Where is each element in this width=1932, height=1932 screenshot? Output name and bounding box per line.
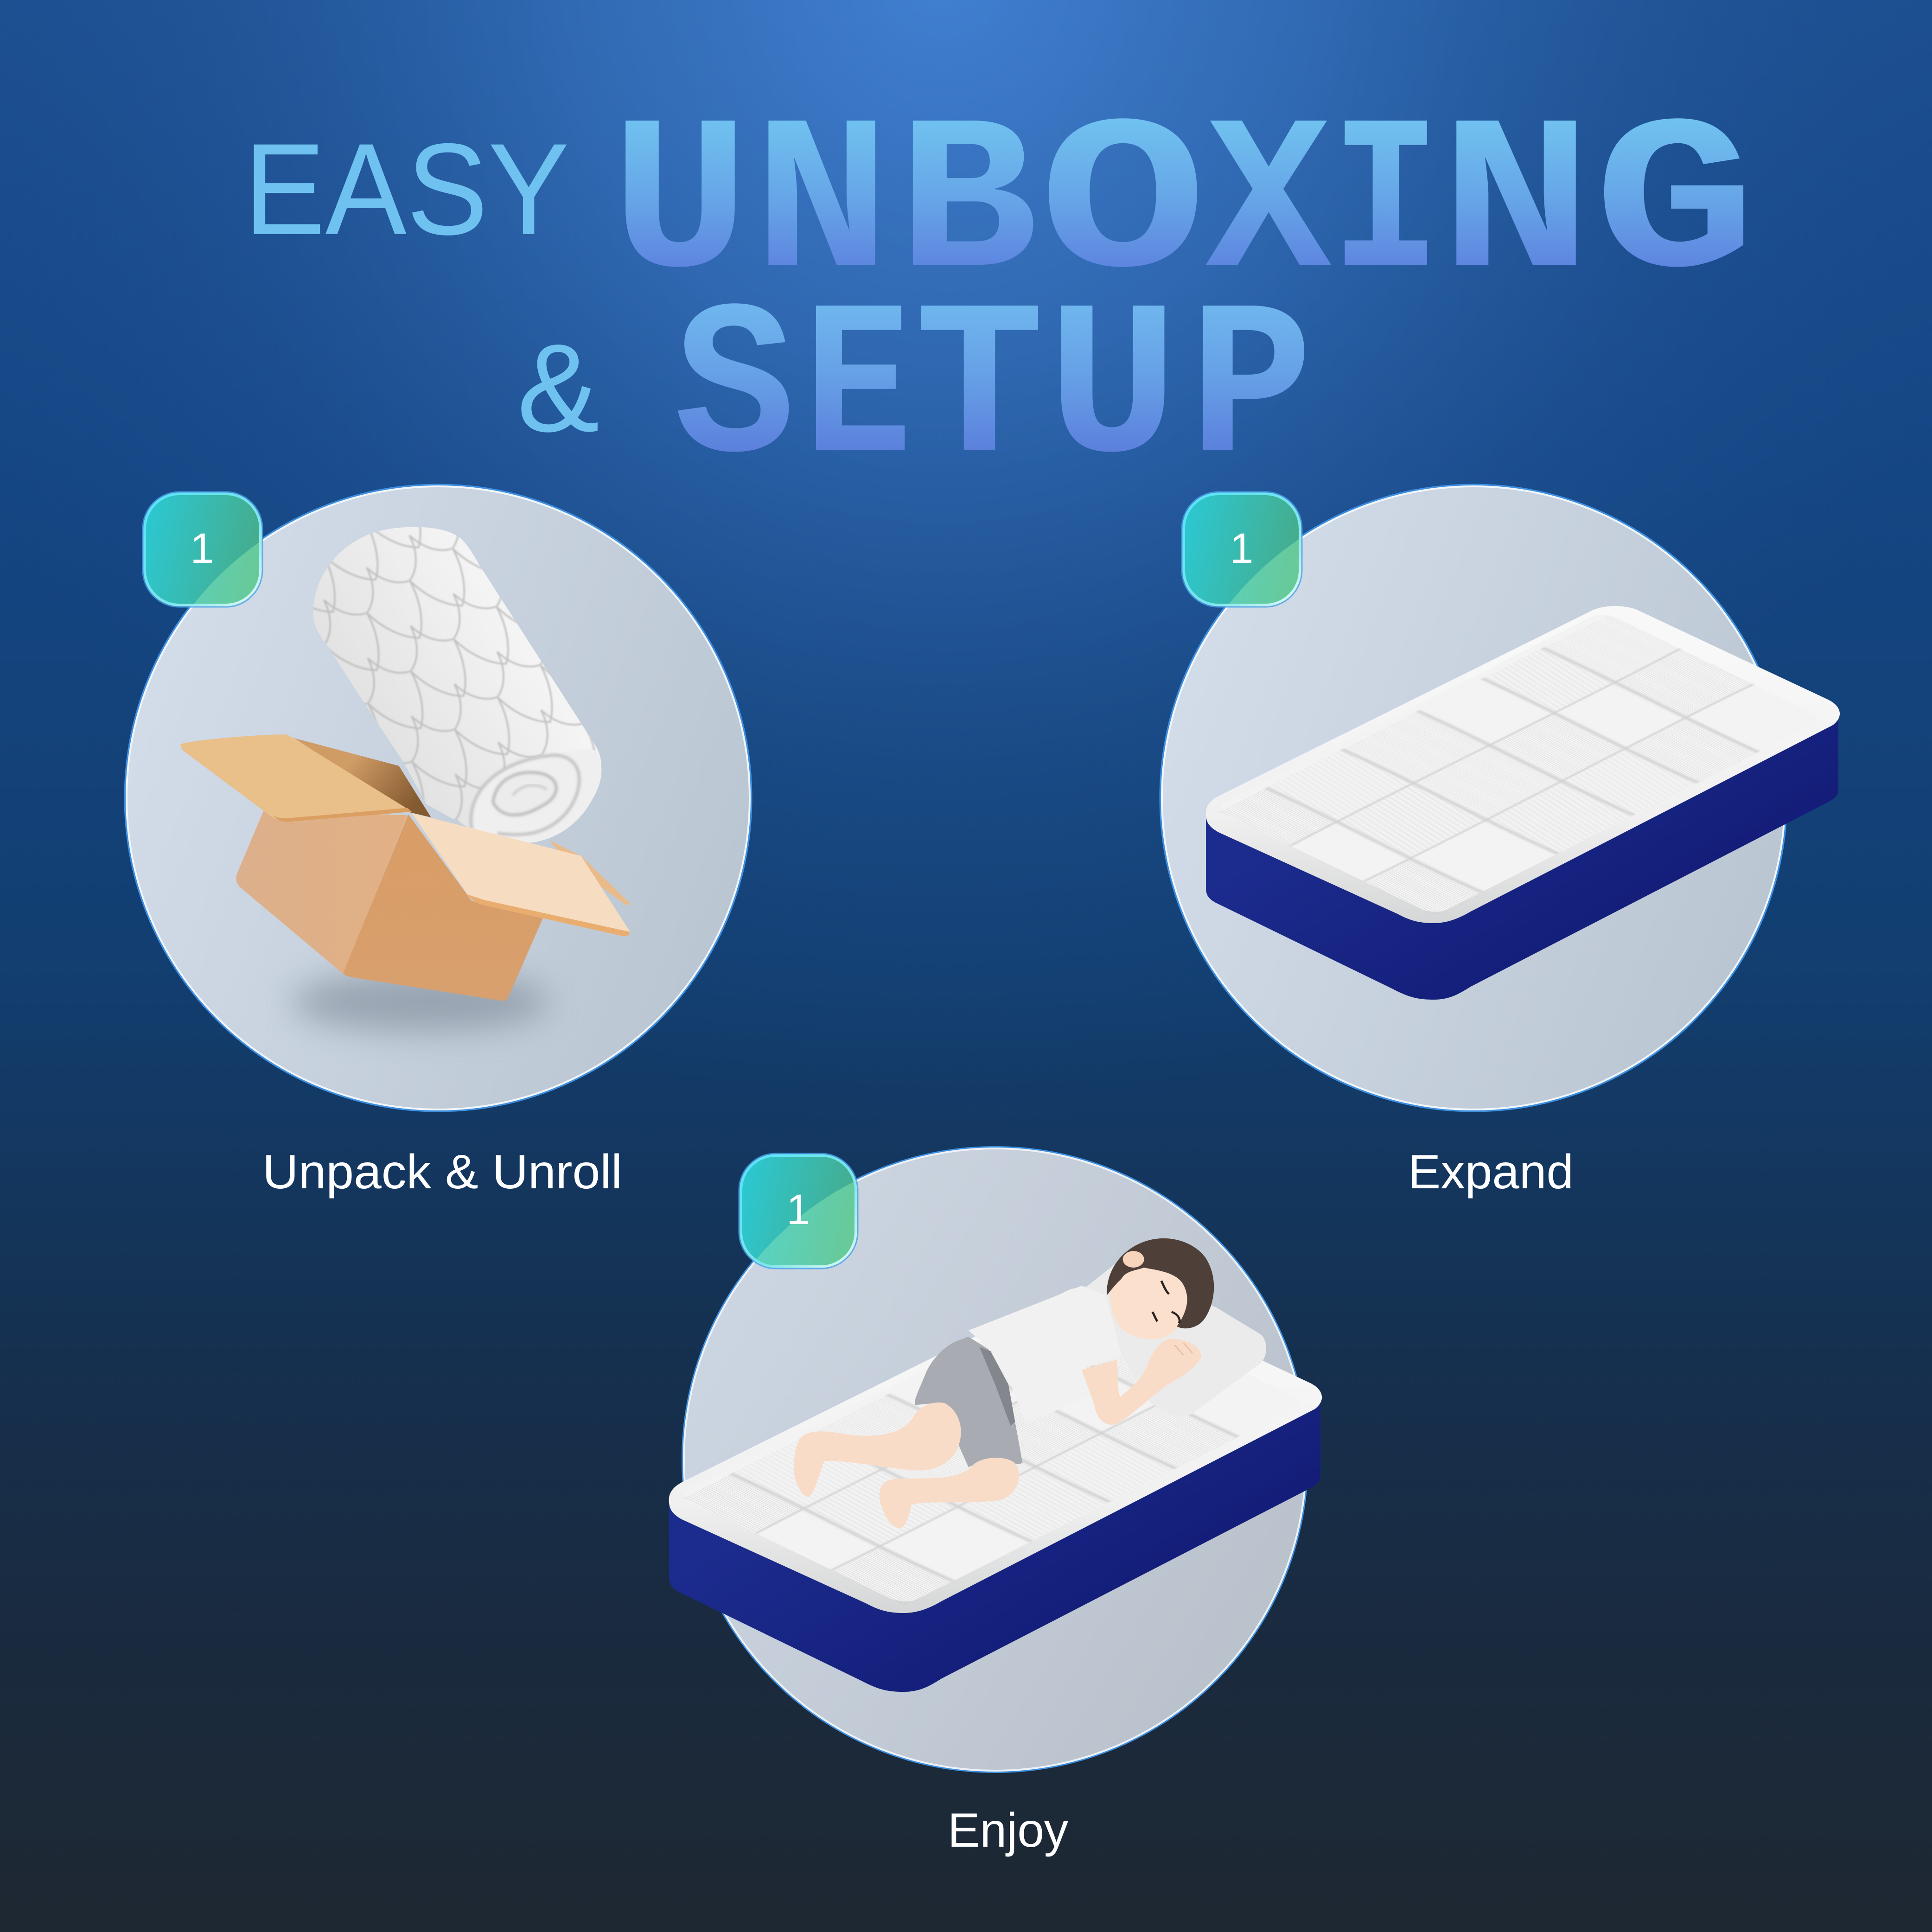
step badge — [1182, 492, 1302, 607]
icon: mattress — [669, 1286, 1322, 1692]
title: T — [914, 268, 1045, 516]
icon: open cardboard box with rolled mattress — [180, 519, 631, 1032]
title: E — [804, 268, 912, 516]
title: S — [674, 268, 795, 516]
icon: person sleeping on pillow — [794, 1238, 1266, 1528]
panel: step enjoy — [669, 1147, 1322, 1857]
title: X — [1206, 83, 1333, 331]
step label: Enjoy — [948, 1804, 1068, 1857]
step badge: 1 — [1230, 525, 1254, 572]
title: B — [897, 83, 1038, 331]
circle backdrop — [1160, 485, 1786, 1111]
step label: Expand — [1408, 1145, 1574, 1199]
title: G — [1594, 83, 1757, 331]
title: & — [517, 319, 599, 458]
title: I — [1331, 83, 1441, 331]
title: EASY — [244, 116, 569, 262]
step badge — [739, 1154, 858, 1269]
title: U — [1047, 268, 1178, 516]
step badge: 1 — [190, 525, 214, 572]
title: N — [753, 83, 890, 331]
title — [244, 83, 1757, 516]
icon: expanded mattress — [1206, 606, 1840, 1000]
panel: step expand — [1160, 485, 1840, 1199]
title: O — [1039, 83, 1207, 331]
title: U — [611, 83, 749, 331]
step badge: 1 — [786, 1186, 810, 1233]
title: P — [1189, 268, 1313, 516]
circle backdrop — [125, 485, 751, 1111]
title: N — [1440, 83, 1593, 331]
circle backdrop — [682, 1147, 1307, 1772]
panel: step unpack and unroll — [125, 485, 751, 1199]
step badge — [143, 492, 262, 607]
step label: Unpack & Unroll — [262, 1145, 622, 1199]
